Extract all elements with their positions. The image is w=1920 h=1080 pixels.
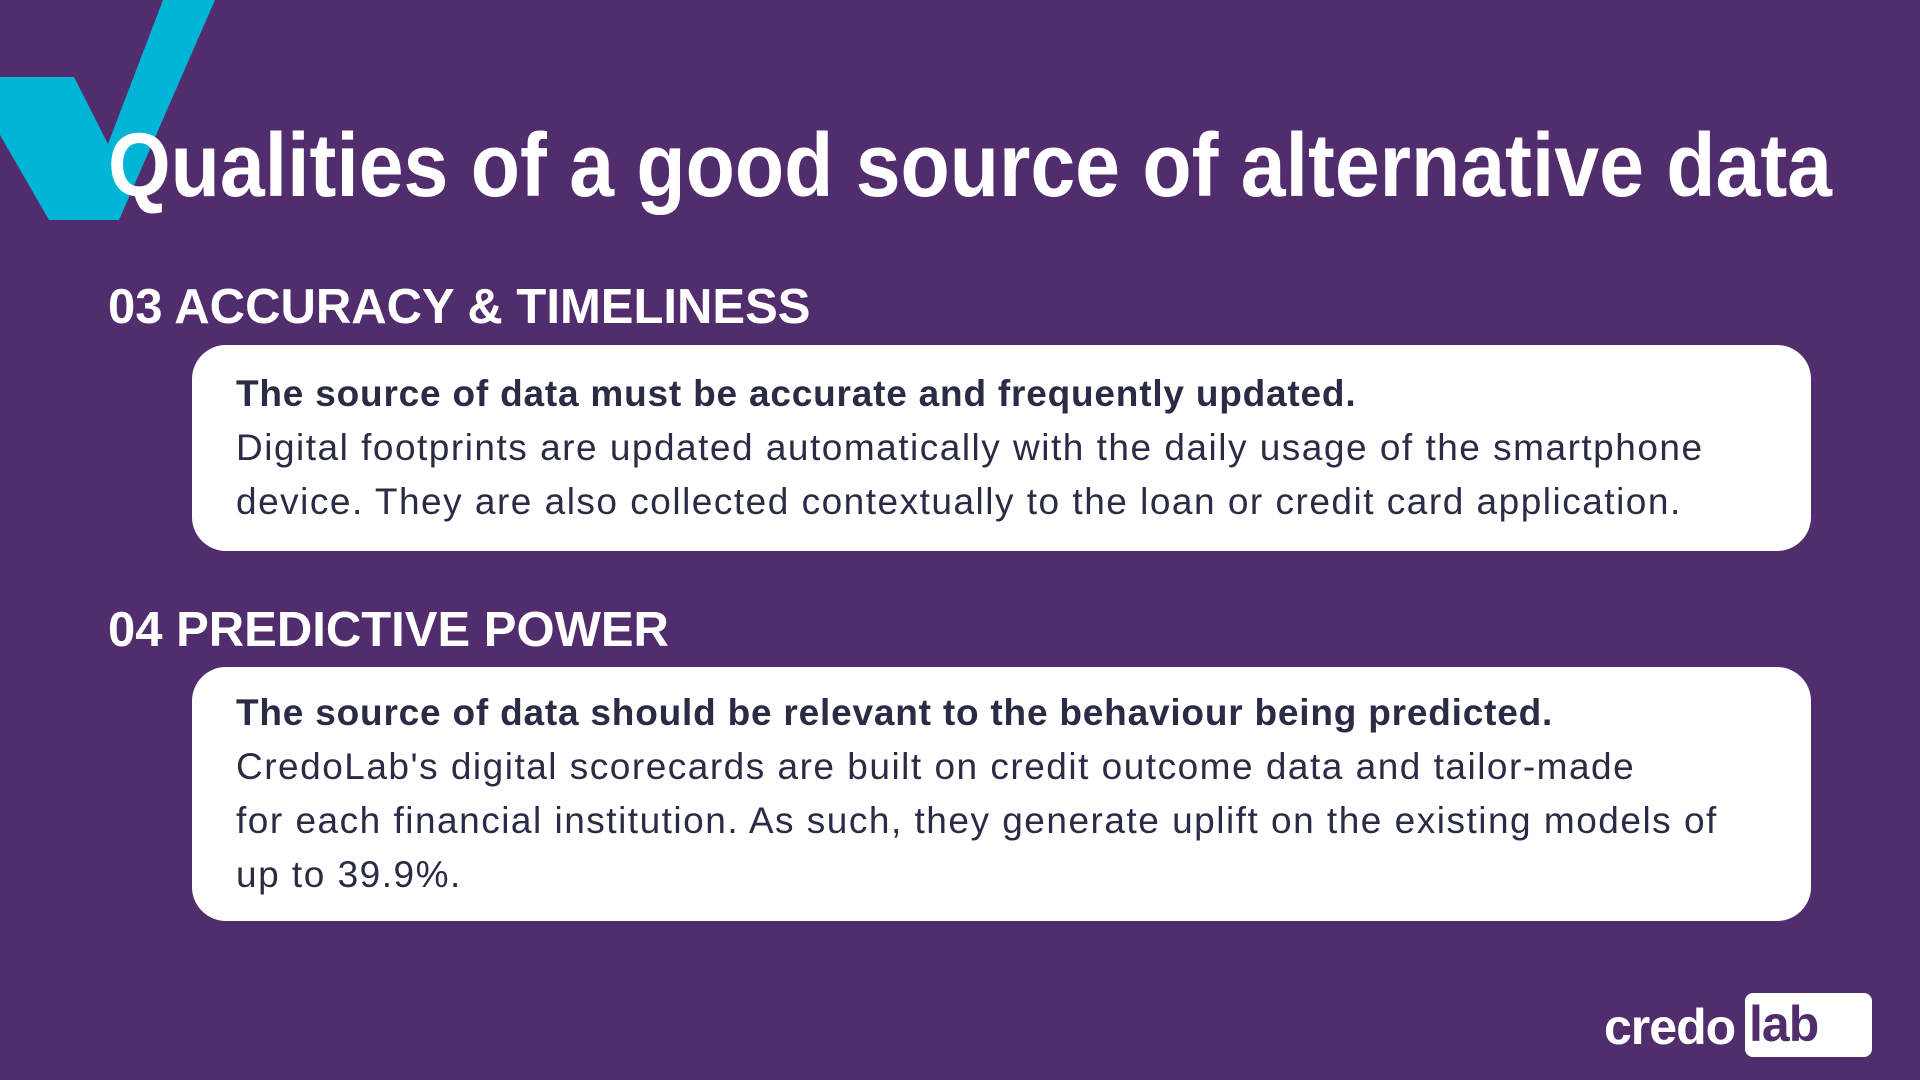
card: predictive power	[192, 667, 1811, 921]
logo: credolab	[1604, 993, 1872, 1057]
card: accuracy: device. They are also collected contextually to the loan or credit card application.	[236, 481, 1682, 522]
card: predictive power: for each financial institution. As such, they generate uplift on the existing models of	[236, 800, 1718, 841]
heading: 04 predictive power: 04 PREDICTIVE POWER	[108, 603, 669, 657]
card: accuracy: Digital footprints are updated automatically with the daily usage of the smartphone	[236, 427, 1704, 468]
card: predictive power: The source of data should be relevant to the behaviour being predicted.	[236, 692, 1553, 733]
card: accuracy: The source of data must be accurate and frequently updated.	[236, 373, 1356, 414]
heading: 03 accuracy & timeliness: 03 ACCURACY & TIMELINESS	[108, 280, 810, 334]
logo: credolab: credo	[1604, 999, 1735, 1055]
icon: checkmark	[0, 0, 215, 220]
logo: credolab: lab	[1749, 996, 1818, 1052]
card: predictive power: up to 39.9%.	[236, 854, 462, 895]
card: predictive power: CredoLab's digital scorecards are built on credit outcome data and tailor-made	[236, 746, 1635, 787]
card: accuracy	[192, 345, 1811, 551]
